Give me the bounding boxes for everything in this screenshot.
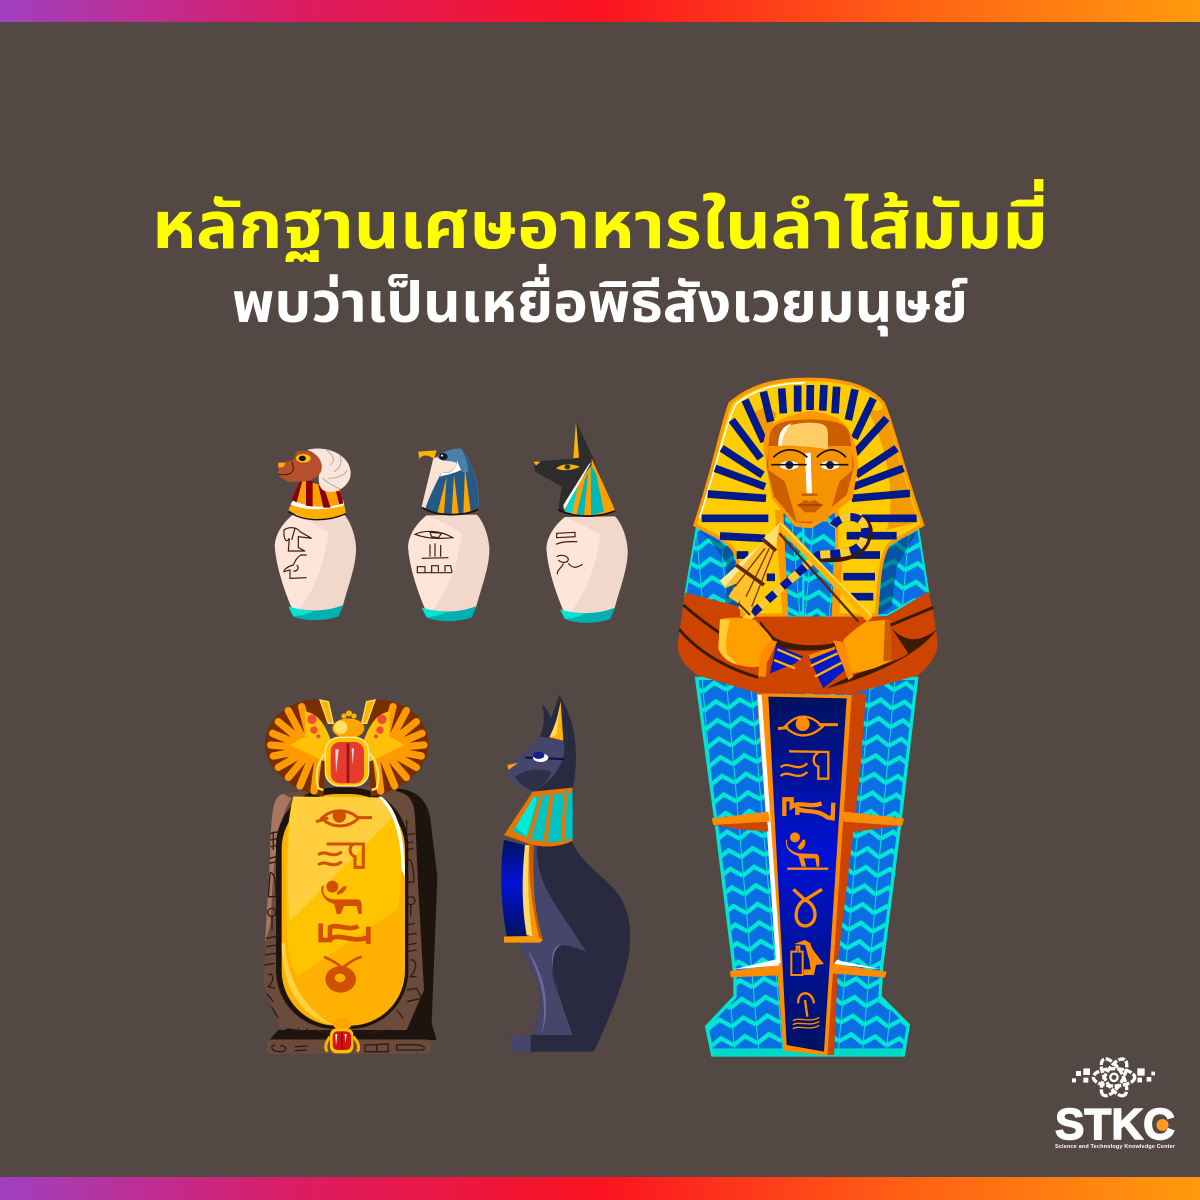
bottom gradient bar (0, 1177, 1200, 1200)
crook and flail (720, 517, 872, 622)
jar: baboon head (275, 448, 356, 620)
jar 2 hieroglyphs (415, 531, 453, 573)
jar: falcon head (408, 448, 489, 621)
face (763, 411, 858, 528)
logo atom mark (1072, 1055, 1155, 1100)
headdress (695, 379, 923, 615)
cat highlights (527, 944, 573, 1035)
cuffs (770, 645, 803, 673)
cat pendant (501, 840, 527, 936)
winged scarab (265, 700, 428, 797)
jar 3 hieroglyphs (556, 532, 583, 574)
bastet cat statue (501, 695, 630, 1052)
canopic jars (275, 421, 628, 623)
stone slab (263, 787, 424, 1037)
top gradient bar (0, 0, 1200, 22)
jar 1 hieroglyphs (284, 528, 312, 578)
cartouche hieroglyphs (316, 809, 372, 993)
lower body and legs (697, 678, 917, 1056)
hands (718, 618, 892, 688)
sarcophagus (677, 379, 938, 1056)
logo tagline: Science and Technology Knowledge Center (1055, 1144, 1176, 1150)
logo wordmark: STKC (1055, 1100, 1175, 1149)
stone base (267, 1039, 431, 1054)
center lappet panel (712, 693, 904, 1056)
jar: jackal head (533, 421, 628, 623)
chest pattern (685, 510, 928, 618)
cat collar (504, 788, 573, 845)
dark rim (276, 787, 408, 1029)
title: หลักฐานเศษอาหารในลำไส้มัมมี่ (152, 179, 1048, 262)
panel hieroglyphs (778, 717, 838, 1029)
scarab cartouche (263, 700, 437, 1054)
cat ear (549, 702, 563, 741)
cat body (512, 695, 630, 1052)
small scarab (326, 1013, 359, 1053)
belts (712, 812, 904, 826)
cat ear back (538, 704, 552, 740)
arm band (677, 592, 938, 694)
STKC logo (1055, 1055, 1176, 1150)
cartouche (282, 794, 405, 1026)
cat chest (518, 845, 586, 1035)
logo orange dot (1156, 1119, 1168, 1131)
subtitle: พบว่าเป็นเหยื่อพิธีสังเวยมนุษย์ (232, 263, 968, 337)
stone carvings (264, 820, 424, 1052)
stone shadow (270, 788, 437, 1040)
cat head (507, 737, 564, 792)
